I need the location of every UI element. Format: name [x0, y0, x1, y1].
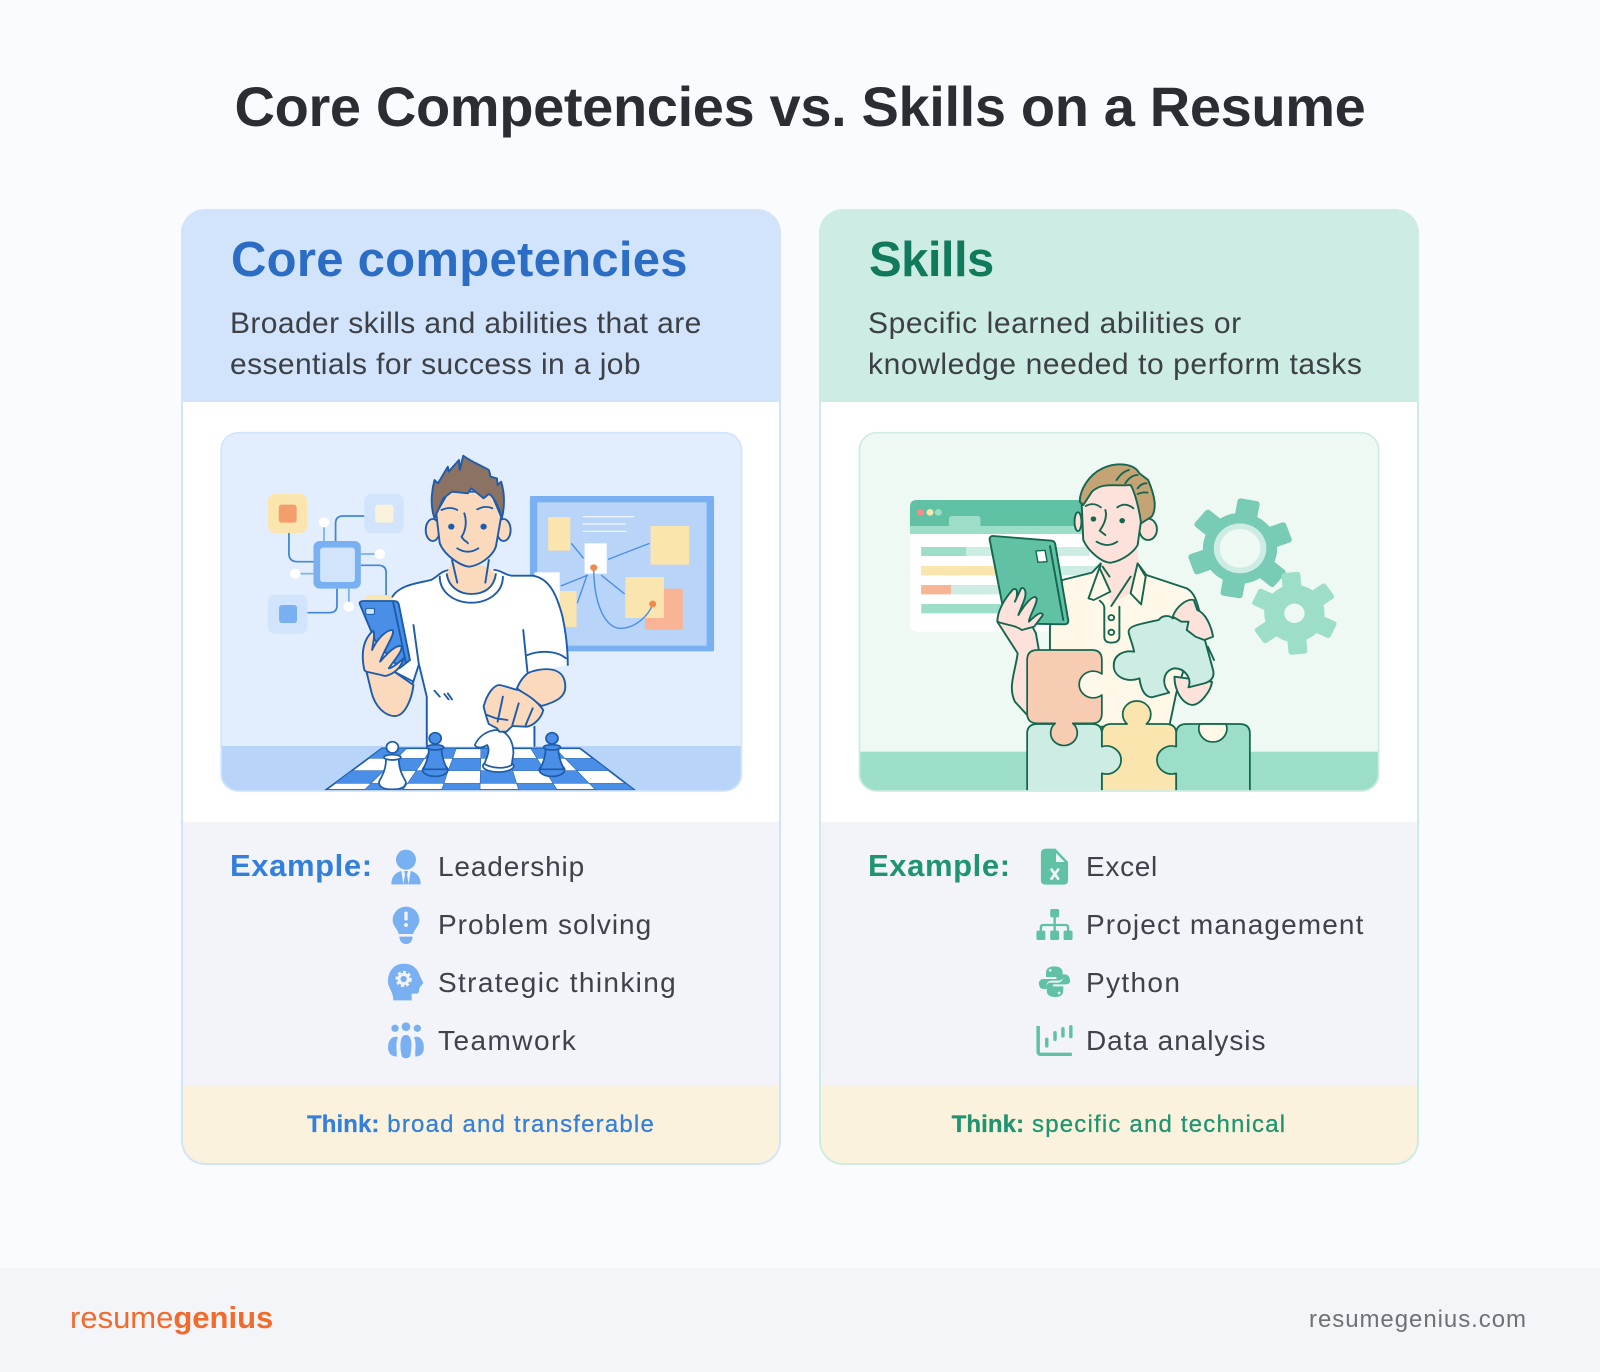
pin board: [530, 496, 714, 651]
heading: core competencies: Core competencies: [231, 232, 688, 286]
illustration: man with puzzle pieces: [858, 432, 1380, 792]
icon: data analysis: [1036, 1025, 1073, 1056]
example label: Example:: [868, 848, 1011, 883]
icon: leadership: [391, 850, 421, 884]
panel header background: [181, 209, 781, 402]
browser window: [910, 500, 1097, 632]
icon: excel: [1040, 848, 1068, 885]
puzzle pieces: [1027, 650, 1250, 792]
man: [360, 456, 568, 747]
footer bar: [0, 1268, 1600, 1372]
chess pieces: [379, 730, 565, 789]
panel: core competencies: [181, 209, 781, 1165]
icon: strategic thinking: [388, 964, 424, 1000]
description: Specific learned abilities or: [868, 307, 1242, 340]
text: excel: Excel: [1086, 851, 1158, 882]
man: [990, 464, 1214, 727]
heading: skills: Skills: [869, 232, 994, 286]
website: resumegenius.com: [1309, 1306, 1527, 1333]
icon: problem solving: [392, 906, 420, 944]
text: strategic thinking: Strategic thinking: [438, 967, 677, 998]
think strip: [181, 1084, 781, 1166]
icon: project management: [1036, 909, 1073, 940]
text: python: Python: [1086, 967, 1181, 998]
text: project management: Project management: [1086, 909, 1365, 940]
text: leadership: Leadership: [438, 851, 585, 882]
think text: Think: broad and transferable: [307, 1111, 655, 1138]
panel header background: [819, 209, 1419, 402]
description: knowledge needed to perform tasks: [868, 348, 1362, 381]
description: [868, 307, 1362, 381]
examples background: [819, 822, 1419, 1084]
examples background: [181, 822, 781, 1084]
text: teamwork: Teamwork: [438, 1025, 577, 1056]
text: problem solving: Problem solving: [438, 909, 652, 940]
description: Broader skills and abilities that are: [230, 307, 702, 340]
icon: python: [1038, 966, 1070, 997]
network diagram: [268, 494, 404, 634]
text: data analysis: Data analysis: [1086, 1025, 1266, 1056]
illustration: man playing chess: [220, 432, 742, 792]
logo: resumegenius: [70, 1300, 273, 1335]
description: essentials for success in a job: [230, 348, 641, 381]
title: Core Competencies vs. Skills on a Resume: [235, 74, 1365, 138]
example label: Example:: [230, 848, 373, 883]
description: [230, 307, 702, 381]
think text: Think: specific and technical: [952, 1111, 1286, 1138]
gears: [1187, 498, 1338, 655]
think strip: [819, 1084, 1419, 1166]
hand on knight: [484, 685, 543, 732]
panel: skills: [819, 209, 1419, 1165]
chess board: [326, 748, 634, 790]
icon: teamwork: [388, 1022, 424, 1058]
